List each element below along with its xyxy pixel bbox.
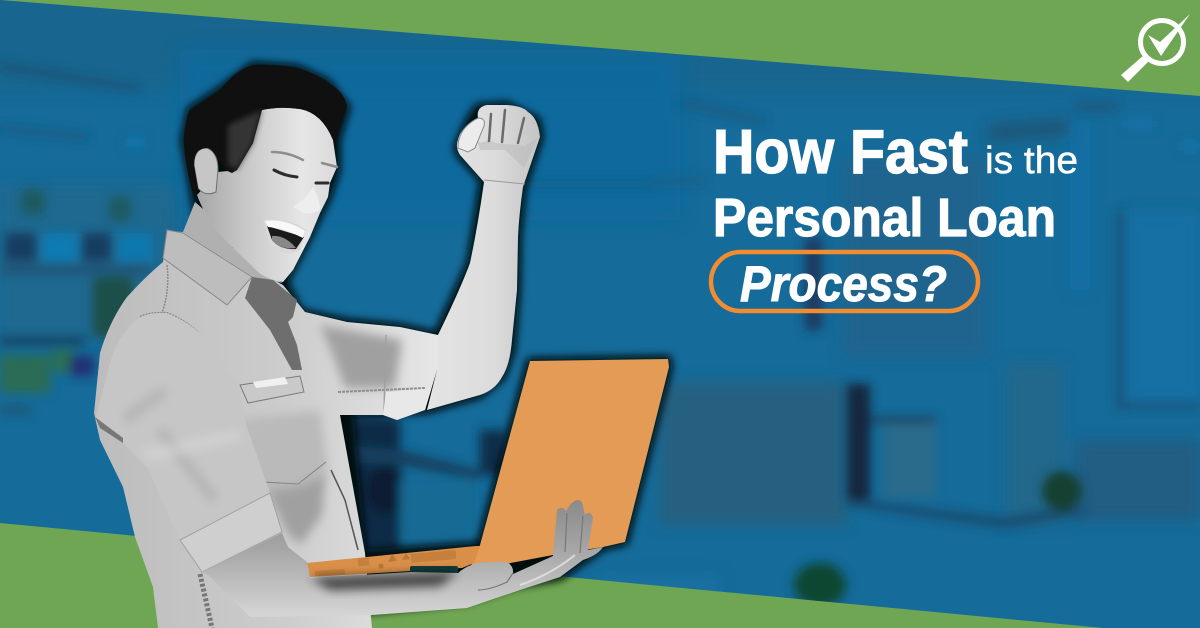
logo: magnifier with check mark	[1121, 14, 1190, 82]
title line 2: Personal Loan	[713, 188, 1056, 248]
nose	[293, 187, 320, 214]
open laughing mouth	[263, 219, 306, 253]
dark halo behind person	[184, 65, 669, 610]
raised arm and fist	[427, 105, 540, 410]
title	[711, 118, 1078, 312]
highlighted word in orange pill: Process?	[740, 256, 947, 312]
patterned inner placket	[245, 277, 302, 370]
eyes and brows	[272, 152, 337, 183]
ear	[194, 148, 218, 194]
shirt details: folds, pocket and placket	[140, 265, 437, 628]
hair	[184, 65, 347, 200]
laptop base	[307, 546, 480, 577]
neck	[183, 202, 283, 283]
shirt body	[94, 231, 438, 628]
title line 1: is the	[985, 140, 1078, 182]
collar	[163, 230, 252, 305]
title line 1: How Fast	[713, 118, 968, 187]
face	[197, 108, 337, 282]
person with laptop	[94, 65, 669, 628]
laptop lid	[470, 359, 669, 568]
forearm and hand holding laptop	[202, 500, 603, 617]
left sleeve and rolled cuff	[95, 313, 282, 572]
